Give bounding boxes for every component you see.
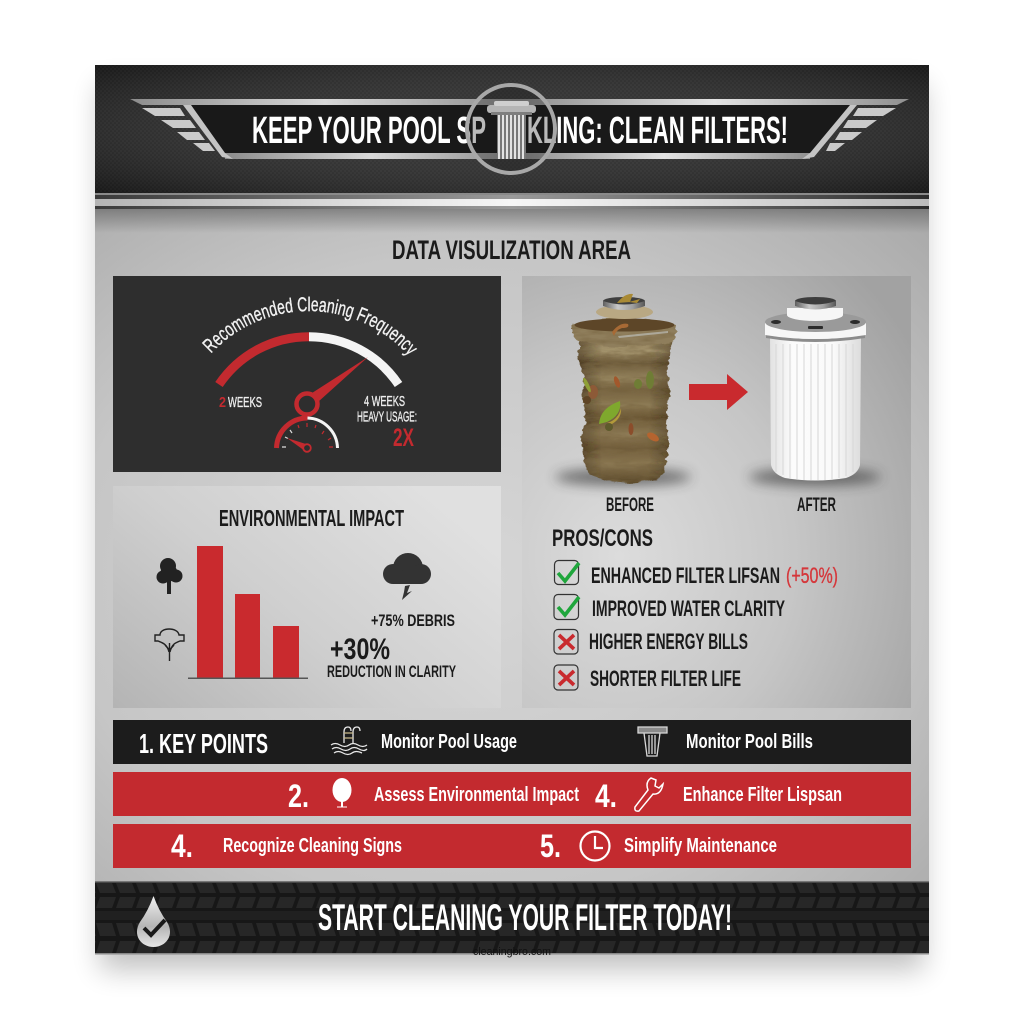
number 4: 4. <box>595 778 617 814</box>
stat: clarity: REDUCTION IN CLARITY <box>327 662 456 681</box>
site credit: cleaningbro.com <box>473 946 551 958</box>
pro item 2: IMPROVED WATER CLARITY <box>592 596 785 621</box>
label: 4 weeks, heavy usage: 4 WEEKS <box>364 393 405 410</box>
pro item 1 <box>554 560 838 588</box>
poster card <box>95 65 929 954</box>
left wing feathers <box>142 108 215 151</box>
con item 2 <box>554 665 741 691</box>
clean filter <box>749 297 881 486</box>
label: 4 weeks, heavy usage: 2X <box>393 424 414 452</box>
label: 2 weeks <box>219 394 262 411</box>
panel title: ENVIRONMENTAL IMPACT <box>219 505 404 531</box>
label: after: AFTER <box>797 495 836 516</box>
label: enhance filter lispsan: Enhance Filter Lispsan <box>683 784 842 806</box>
icon: clock <box>580 832 610 860</box>
icon: tree <box>332 778 352 807</box>
right wing feathers <box>826 108 896 151</box>
arrow <box>689 374 748 410</box>
icon: wrench <box>635 778 663 811</box>
con item 1: HIGHER ENERGY BILLS <box>589 629 748 654</box>
winged title badge <box>130 85 909 173</box>
number 5: 5. <box>540 828 561 864</box>
bar chart <box>188 546 308 679</box>
panel: environmental impact <box>113 486 501 708</box>
title: AR <box>499 110 524 152</box>
label: 4 weeks, heavy usage <box>357 393 417 452</box>
icon: tree <box>156 558 182 594</box>
small gauge <box>276 418 338 452</box>
icon: filter <box>638 727 667 756</box>
con item 2: SHORTER FILTER LIFE <box>590 666 741 691</box>
key points bar 2 <box>113 772 911 816</box>
number 2: 2. <box>288 778 309 814</box>
card shadow <box>100 85 924 970</box>
title: KEEP YOUR POOL SP <box>252 110 486 152</box>
panel: cleaning frequency gauge <box>113 276 501 472</box>
icon: storm cloud <box>383 553 431 600</box>
label: 2 weeks: 2 <box>219 394 226 411</box>
label: monitor pool bills: Monitor Pool Bills <box>686 731 813 753</box>
stat: clarity <box>327 633 456 681</box>
label: recognize cleaning signs: Recognize Cleaning Signs <box>223 835 402 857</box>
call to action: START CLEANING YOUR FILTER TODAY! <box>318 897 732 938</box>
pros and cons heading: PROS/CONS <box>552 525 653 552</box>
pro item 2 <box>554 594 785 621</box>
pro item 1: ENHANCED FILTER LIFSAN <box>591 563 780 588</box>
key points bar 1 <box>113 720 911 764</box>
icon: pool ladder <box>331 727 367 754</box>
section heading: DATA VISULIZATION AREA <box>392 235 631 265</box>
icon: water drop with check <box>137 896 170 947</box>
label: assess environmental impact: Assess Environmental Impact <box>374 784 579 806</box>
number 4: 4. <box>171 828 193 864</box>
pro item 1: (+50%) <box>786 563 838 588</box>
label: monitor pool usage: Monitor Pool Usage <box>381 731 517 753</box>
gauge needle <box>296 357 368 414</box>
curved gauge title: Recommended Cleaning Frequency <box>202 296 418 356</box>
icon: outline plant <box>155 629 184 661</box>
key points heading: 1. KEY POINTS <box>139 728 268 759</box>
key points bar 3 <box>113 824 911 868</box>
panel: before and after <box>522 276 911 708</box>
label: simplify maintenance: Simplify Maintenance <box>624 835 777 857</box>
label: before: BEFORE <box>606 495 654 516</box>
stat: clarity: +30% <box>330 633 390 666</box>
dirty filter <box>555 294 691 486</box>
con item 1 <box>554 629 748 654</box>
label: 2 weeks: WEEKS <box>228 394 262 411</box>
header band <box>95 65 929 209</box>
oval filter emblem <box>467 85 555 173</box>
footer band <box>95 881 929 958</box>
leaves and debris <box>582 371 660 443</box>
stat: debris: +75% DEBRIS <box>371 611 455 630</box>
label: 4 weeks, heavy usage: HEAVY USAGE: <box>357 408 417 426</box>
gauge arc <box>219 337 398 384</box>
title: KLING: CLEAN FILTERS! <box>527 110 788 152</box>
